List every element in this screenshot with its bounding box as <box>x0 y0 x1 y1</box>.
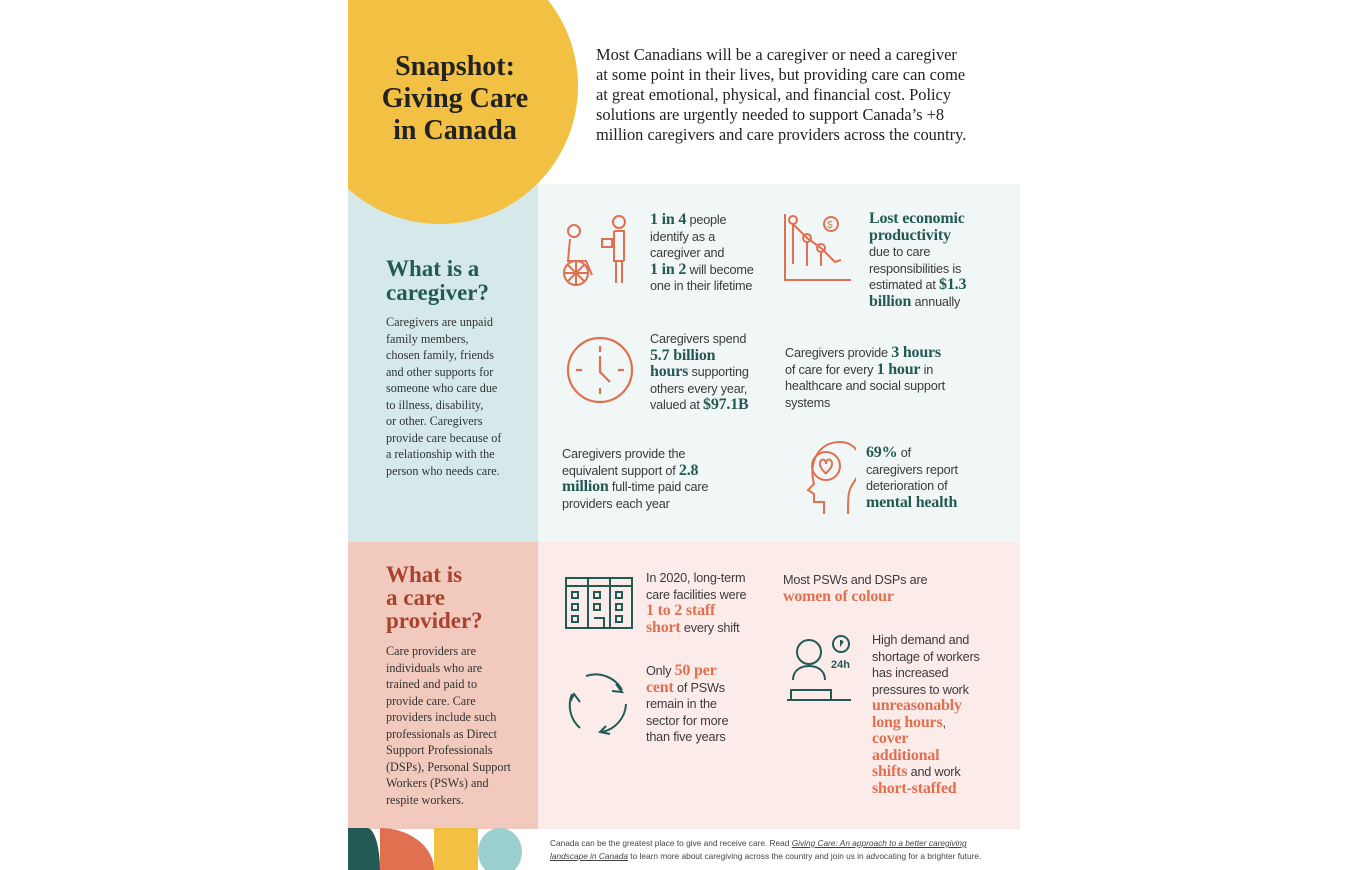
caregiver definition <box>386 315 502 478</box>
stat: 2.8 million <box>562 447 708 510</box>
care provider definition: Workers (PSWs) and <box>386 776 489 790</box>
stat: staff short: short every shift <box>646 618 740 636</box>
caregiver definition: provide care because of <box>386 430 501 444</box>
footer text <box>550 838 981 861</box>
stat: women of colour: women of colour <box>783 588 894 604</box>
title: in Canada <box>393 115 517 146</box>
heading: what is a care provider <box>386 562 483 633</box>
stat: staff short: care facilities were <box>646 588 746 602</box>
intro text: at great emotional, physical, and financial cost. Policy <box>596 85 951 104</box>
intro text: at some point in their lives, but providing care can come <box>596 65 965 84</box>
stat: women of colour: Most PSWs and DSPs are <box>783 573 927 587</box>
stat: lost economic productivity: estimated at $1.3 <box>869 276 966 293</box>
stat: 5.7 billion hours <box>650 332 749 413</box>
stat: 1 in 4: 1 in 4 people <box>650 211 726 228</box>
icon: worker 24h <box>787 635 851 701</box>
care provider definition: providers include such <box>386 710 496 724</box>
icon: recycle arrows <box>568 673 627 735</box>
stat: high demand: has increased <box>872 666 948 680</box>
stat: 1 in 4: one in their lifetime <box>650 279 752 293</box>
intro text <box>596 45 966 144</box>
stat: high demand: long hours, <box>872 714 946 730</box>
stat: 5.7 billion hours: others every year, <box>650 382 747 396</box>
stat: staff short: In 2020, long-term <box>646 571 745 585</box>
intro text: Most Canadians will be a caregiver or need a caregiver <box>596 45 957 64</box>
stat: 1 in 4: 1 in 2 will become <box>650 260 754 278</box>
stat: 69% mental health <box>866 444 958 510</box>
stat: staff short <box>646 571 746 636</box>
title <box>382 51 528 146</box>
stat: lost economic productivity: due to care <box>869 245 930 259</box>
stat: 5.7 billion hours: Caregivers spend <box>650 332 746 346</box>
stat: lost economic productivity: billion annually <box>869 292 960 310</box>
heading: what is a care provider: What is <box>386 562 462 587</box>
footer text: Canada can be the greatest place to give and receive care. Read Giving Care: An approach to a better caregiving <box>550 838 967 848</box>
intro text: solutions are urgently needed to support Canada’s +8 <box>596 105 944 124</box>
icon: brain head <box>806 441 856 514</box>
stat: 1 in 4 <box>650 211 754 293</box>
caregiver definition: chosen family, friends <box>386 348 494 362</box>
stat: 5.7 billion hours: hours supporting <box>650 363 749 380</box>
stat: 69% mental health: caregivers report <box>866 462 958 476</box>
caregiver definition: Caregivers are unpaid <box>386 315 493 329</box>
stat: 50 per cent: than five years <box>646 730 726 744</box>
heading: what is a care provider: a care <box>386 585 445 610</box>
stat: 1 in 4: identify as a <box>650 230 715 244</box>
care provider definition: professionals as Direct <box>386 726 497 740</box>
title: Giving Care <box>382 83 528 114</box>
stat: 69% mental health: mental health <box>866 494 957 510</box>
stat: 50 per cent: cent of PSWs <box>646 678 725 696</box>
stat: 2.8 million: Caregivers provide the <box>562 447 685 461</box>
heading: what is a care provider: provider? <box>386 608 483 633</box>
stat: 3 hours: healthcare and social support <box>785 379 945 393</box>
icon: economic chart <box>784 214 851 281</box>
care provider definition: trained and paid to <box>386 677 477 691</box>
caregiver definition: and other supports for <box>386 364 493 378</box>
stat: 50 per cent: sector for more <box>646 714 728 728</box>
stat: 3 hours: Caregivers provide 3 hours <box>785 344 941 361</box>
stat: 50 per cent: remain in the <box>646 697 717 711</box>
stat: women of colour <box>783 573 927 604</box>
care provider definition: provide care. Care <box>386 694 476 708</box>
heading: what is a caregiver <box>386 256 489 305</box>
stat: 5.7 billion hours: valued at $97.1B <box>650 396 749 413</box>
caregiver definition: or other. Caregivers <box>386 414 482 428</box>
stat: 3 hours <box>785 344 946 410</box>
footer text: landscape in Canada to learn more about caregiving across the country and join us in advocating for a brighter future. <box>550 851 981 861</box>
heading: what is a caregiver: What is a <box>386 256 479 281</box>
stat: high demand: cover <box>872 730 908 747</box>
title: Snapshot: <box>395 51 515 82</box>
footer shapes <box>348 828 522 870</box>
caregiver definition: person who needs care. <box>386 464 500 478</box>
caregiver definition: someone who care due <box>386 381 497 395</box>
care provider definition: Support Professionals <box>386 743 493 757</box>
stat: 2.8 million: equivalent support of 2.8 <box>562 462 698 478</box>
stat: lost economic productivity <box>869 210 966 310</box>
caregiver definition: family members, <box>386 332 469 346</box>
background: teal row right <box>538 184 1020 542</box>
stat: 50 per cent <box>646 662 728 744</box>
background: teal row left <box>348 184 538 542</box>
caregiver definition: to illness, disability, <box>386 398 483 412</box>
stat: 2.8 million: providers each year <box>562 496 670 510</box>
yellow circle <box>348 0 578 224</box>
stat: 1 in 4: caregiver and <box>650 246 724 260</box>
icon: worker 24h: 24h <box>831 659 850 671</box>
caregiver definition: a relationship with the <box>386 447 495 461</box>
care provider definition: Care providers are <box>386 644 476 658</box>
icon: wheelchair caregiver <box>563 215 626 286</box>
stat: lost economic productivity: productivity <box>869 226 951 244</box>
stat: high demand: pressures to work <box>872 682 969 696</box>
stat: high demand: unreasonably <box>872 697 962 714</box>
stat: lost economic productivity: responsibilities is <box>869 262 961 276</box>
stat: 3 hours: of care for every 1 hour in <box>785 360 933 378</box>
stat: 50 per cent: Only 50 per <box>646 662 717 679</box>
icon: building <box>565 577 633 629</box>
stat: 69% mental health: 69% of <box>866 444 911 461</box>
heading: what is a caregiver: caregiver? <box>386 280 489 305</box>
care provider definition <box>386 644 511 806</box>
stat: high demand: additional <box>872 746 939 764</box>
icon: clock <box>566 336 634 404</box>
stat: 3 hours: systems <box>785 396 830 410</box>
stat: 5.7 billion hours: 5.7 billion <box>650 346 715 364</box>
stat: lost economic productivity: Lost economic <box>869 210 965 227</box>
stat: high demand <box>872 633 980 796</box>
stat: high demand: High demand and <box>872 633 969 647</box>
background: pink row left <box>348 542 538 829</box>
stat: high demand: short-staffed <box>872 780 956 796</box>
stat: high demand: shortage of workers <box>872 650 980 664</box>
intro text: million caregivers and care providers across the country. <box>596 125 966 144</box>
background: pink row right <box>538 542 1020 829</box>
care provider definition: (DSPs), Personal Support <box>386 760 511 774</box>
icon: economic chart: $ <box>827 220 833 231</box>
stat: 2.8 million: million full-time paid care <box>562 478 708 495</box>
stat: high demand: shifts and work <box>872 763 960 780</box>
stat: 69% mental health: deterioration of <box>866 479 947 493</box>
care provider definition: respite workers. <box>386 792 464 806</box>
care provider definition: individuals who are <box>386 660 482 674</box>
stat: staff short: 1 to 2 staff <box>646 602 715 619</box>
